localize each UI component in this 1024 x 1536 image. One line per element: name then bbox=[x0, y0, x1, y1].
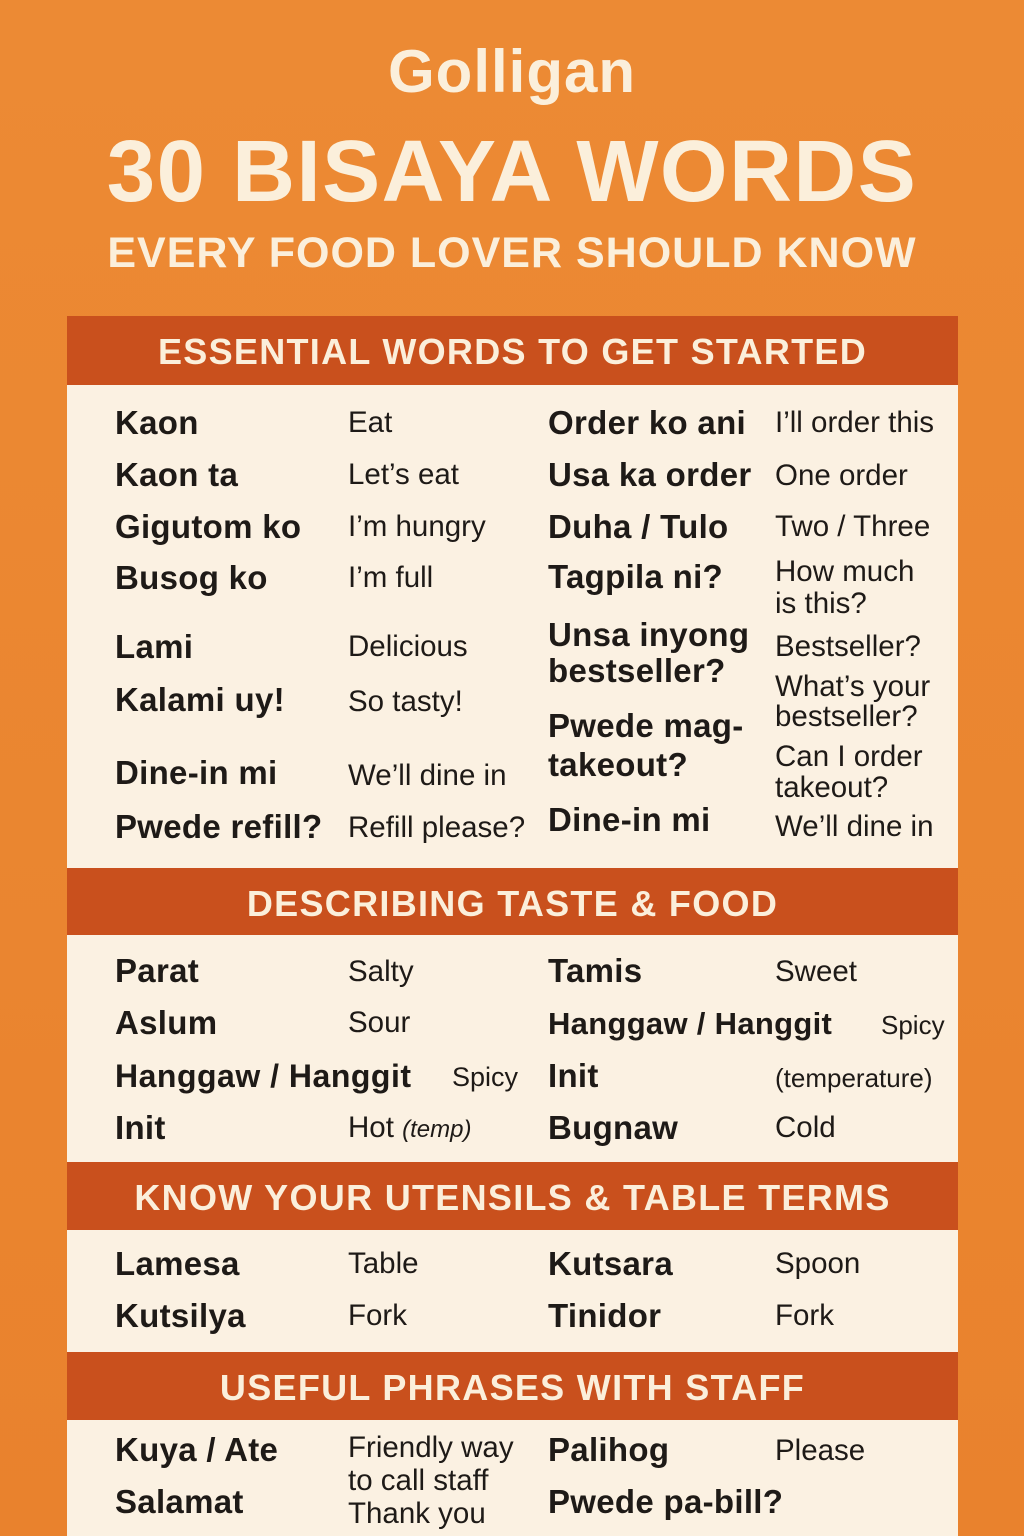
word list: essential: How much bbox=[775, 555, 914, 588]
word list: taste: Bugnaw bbox=[548, 1109, 678, 1146]
word list: essential: Duha / Tulo bbox=[548, 508, 728, 545]
panel body: essential words bbox=[67, 385, 958, 868]
word list: essential bbox=[115, 404, 934, 845]
panel body: utensils bbox=[67, 1230, 958, 1352]
word list: taste: Parat bbox=[115, 952, 199, 989]
panel body: taste bbox=[67, 935, 958, 1162]
word list: essential: Let’s eat bbox=[348, 458, 459, 491]
panel header: taste bbox=[67, 868, 958, 935]
word list: utensils: Fork bbox=[775, 1299, 834, 1332]
word list: staff: Pwede pa-bill? bbox=[548, 1483, 783, 1520]
word list: essential: Can I order bbox=[775, 740, 923, 773]
word list: staff: to call staff bbox=[348, 1464, 488, 1497]
word list: essential: So tasty! bbox=[348, 685, 463, 718]
word list: essential: Dine-in mi bbox=[548, 801, 711, 838]
word list: utensils: Kutsilya bbox=[115, 1297, 246, 1334]
word list: taste: Hanggaw / Hanggit bbox=[115, 1058, 412, 1094]
word list: essential: Kalami uy! bbox=[115, 681, 285, 718]
word list: taste: Init bbox=[548, 1057, 599, 1094]
word list: essential: We’ll dine in bbox=[348, 759, 507, 792]
word list: taste: Cold bbox=[775, 1111, 836, 1144]
panel body: staff bbox=[67, 1420, 958, 1536]
word list: taste: Aslum bbox=[115, 1004, 217, 1041]
word list: staff: Please bbox=[775, 1434, 865, 1467]
word list: utensils bbox=[115, 1245, 860, 1334]
panel header: taste: DESCRIBING TASTE & FOOD bbox=[247, 883, 778, 924]
word list: utensils: Table bbox=[348, 1247, 419, 1280]
word list: essential: Two / Three bbox=[775, 510, 930, 543]
word list: taste: (temperature) bbox=[775, 1063, 932, 1093]
word list: essential: is this? bbox=[775, 587, 867, 620]
word list: staff: Palihog bbox=[548, 1431, 669, 1468]
title: main: 30 BISAYA WORDS bbox=[107, 123, 917, 220]
word list: staff bbox=[115, 1431, 865, 1530]
word list: essential: Pwede mag- bbox=[548, 707, 744, 744]
word list: taste: Sweet bbox=[775, 955, 857, 988]
panel header: utensils bbox=[67, 1162, 958, 1230]
word list: taste: Hanggaw / Hanggit bbox=[548, 1006, 832, 1041]
subtitle: EVERY FOOD LOVER SHOULD KNOW bbox=[107, 229, 917, 277]
word list: essential: I’ll order this bbox=[775, 406, 934, 439]
word list: essential: Gigutom ko bbox=[115, 508, 301, 545]
word list: essential: takeout? bbox=[775, 771, 888, 804]
word list: essential: bestseller? bbox=[548, 652, 726, 689]
word list: taste: Sour bbox=[348, 1006, 410, 1039]
word list: utensils: Tinidor bbox=[548, 1297, 661, 1334]
word list: essential: One order bbox=[775, 459, 908, 492]
word list: taste: Hot (temp) bbox=[348, 1111, 471, 1144]
word list: staff: Kuya / Ate bbox=[115, 1431, 278, 1468]
word list: taste: Salty bbox=[348, 955, 414, 988]
word list: taste: Spicy bbox=[452, 1062, 518, 1092]
word list: essential: Tagpila ni? bbox=[548, 558, 723, 595]
word list: staff: Salamat bbox=[115, 1483, 244, 1520]
panel header: utensils: KNOW YOUR UTENSILS & TABLE TERMS bbox=[134, 1177, 891, 1218]
word list: essential: What’s your bbox=[775, 670, 930, 703]
word list: taste: Tamis bbox=[548, 952, 642, 989]
word list: essential: I’m full bbox=[348, 561, 433, 594]
panel header: staff: USEFUL PHRASES WITH STAFF bbox=[220, 1367, 805, 1408]
word list: essential: Busog ko bbox=[115, 559, 268, 596]
word list: essential: Refill please? bbox=[348, 811, 525, 844]
word list: essential: Kaon bbox=[115, 404, 199, 441]
panel header: essential words bbox=[67, 316, 958, 385]
word list: essential: Bestseller? bbox=[775, 630, 921, 663]
word list: staff: Friendly way bbox=[348, 1431, 514, 1464]
word list: essential: Delicious bbox=[348, 630, 468, 663]
word list: staff: Thank you bbox=[348, 1497, 486, 1530]
word list: essential: Order ko ani bbox=[548, 404, 746, 441]
word list: utensils: Kutsara bbox=[548, 1245, 673, 1282]
word list: essential: Dine-in mi bbox=[115, 754, 278, 791]
word list: utensils: Fork bbox=[348, 1299, 407, 1332]
word list: utensils: Lamesa bbox=[115, 1245, 240, 1282]
word list: essential: Unsa inyong bbox=[548, 616, 749, 653]
word list: essential: Lami bbox=[115, 628, 193, 665]
panel header: staff bbox=[67, 1352, 958, 1420]
word list: essential: I’m hungry bbox=[348, 510, 486, 543]
word list: taste: Spicy bbox=[881, 1010, 945, 1040]
word list: essential: Eat bbox=[348, 406, 392, 439]
word list: essential: Usa ka order bbox=[548, 456, 752, 493]
word list: utensils: Spoon bbox=[775, 1247, 860, 1280]
word list: essential: We’ll dine in bbox=[775, 810, 934, 843]
word list: essential: Pwede refill? bbox=[115, 808, 322, 845]
title: brand: Golligan bbox=[388, 38, 636, 105]
word list: essential: takeout? bbox=[548, 746, 688, 783]
word list: taste: Init bbox=[115, 1109, 166, 1146]
panel header: essential words: ESSENTIAL WORDS TO GET STARTED bbox=[158, 331, 867, 372]
word list: taste bbox=[115, 952, 945, 1146]
word list: essential: bestseller? bbox=[775, 700, 918, 733]
word list: essential: Kaon ta bbox=[115, 456, 238, 493]
